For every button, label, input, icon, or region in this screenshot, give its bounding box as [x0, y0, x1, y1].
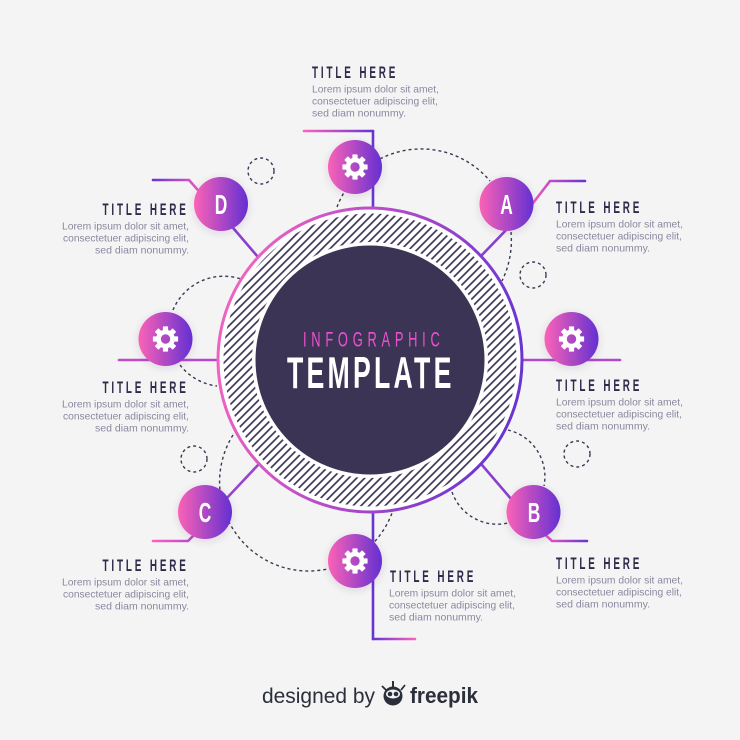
outer gradient ring [218, 208, 522, 512]
icon: freepik logo [382, 681, 405, 706]
text block: bottom gear: sed diam nonummy. [389, 612, 483, 624]
text block: C [62, 556, 189, 612]
dark centre disc [256, 246, 484, 474]
text block: top: sed diam nonummy. [312, 108, 406, 120]
node: top gear [328, 140, 382, 194]
text block: left gear: Lorem ipsum dolor sit amet, [62, 400, 189, 410]
text block: A: consectetuer adipiscing elit, [556, 232, 682, 242]
node: A [480, 177, 534, 231]
node: D [194, 177, 248, 231]
text block: D: sed diam nonummy. [95, 246, 189, 256]
text block: right gear: TITLE HERE [556, 376, 639, 395]
text block: bottom gear: TITLE HERE [390, 567, 473, 586]
text block: right gear: sed diam nonummy. [556, 422, 650, 432]
text block: right gear: Lorem ipsum dolor sit amet, [556, 398, 683, 408]
node: D: D [215, 189, 227, 220]
node: C [178, 485, 232, 539]
text block: C: consectetuer adipiscing elit, [63, 590, 189, 600]
node: A: A [500, 189, 513, 220]
text block: right gear: consectetuer adipiscing elit, [556, 410, 682, 420]
text block: top: TITLE HERE [312, 63, 395, 82]
text block: top: Lorem ipsum dolor sit amet, [312, 84, 439, 96]
node: B: B [528, 497, 540, 528]
hatched band [218, 208, 522, 512]
text block: D [62, 200, 189, 256]
text block: bottom gear: consectetuer adipiscing elit, [389, 600, 515, 612]
node: B [506, 485, 560, 539]
text block: top [312, 63, 439, 120]
text block: A: Lorem ipsum dolor sit amet, [556, 220, 683, 230]
node: left gear [138, 312, 192, 366]
footer credit: designed by [262, 685, 375, 708]
text block: top: consectetuer adipiscing elit, [312, 96, 438, 108]
text block: B: sed diam nonummy. [556, 600, 650, 610]
text block: C: sed diam nonummy. [95, 602, 189, 612]
text block: D: consectetuer adipiscing elit, [63, 234, 189, 244]
footer credit: freepik [410, 683, 479, 708]
text block: bottom gear: Lorem ipsum dolor sit amet, [389, 588, 516, 600]
text block: D: Lorem ipsum dolor sit amet, [62, 222, 189, 232]
text block: B: TITLE HERE [556, 554, 639, 573]
text block: left gear: TITLE HERE [102, 378, 186, 397]
subtitle: INFOGRAPHIC [303, 327, 440, 351]
text block: left gear: sed diam nonummy. [95, 424, 189, 434]
dashed connector arcs [173, 149, 545, 571]
connector lines [119, 131, 620, 639]
text block: B [556, 554, 683, 610]
text block: A: TITLE HERE [556, 198, 639, 217]
main title: TEMPLATE [287, 348, 451, 398]
text block: bottom gear [389, 567, 516, 624]
text block: left gear: consectetuer adipiscing elit, [63, 412, 189, 422]
decorative dashed circles [181, 158, 590, 472]
text block: A: sed diam nonummy. [556, 244, 650, 254]
node: right gear [544, 312, 598, 366]
node: bottom gear [328, 534, 382, 588]
text block: A [556, 198, 683, 254]
text block: left gear [62, 378, 189, 434]
footer credit [262, 681, 479, 708]
node: C: C [199, 497, 211, 528]
text block: C: TITLE HERE [102, 556, 186, 575]
text block: B: Lorem ipsum dolor sit amet, [556, 576, 683, 586]
text block: C: Lorem ipsum dolor sit amet, [62, 578, 189, 588]
text block: right gear [556, 376, 683, 432]
text block: D: TITLE HERE [102, 200, 186, 219]
text block: B: consectetuer adipiscing elit, [556, 588, 682, 598]
central circle [218, 208, 522, 512]
